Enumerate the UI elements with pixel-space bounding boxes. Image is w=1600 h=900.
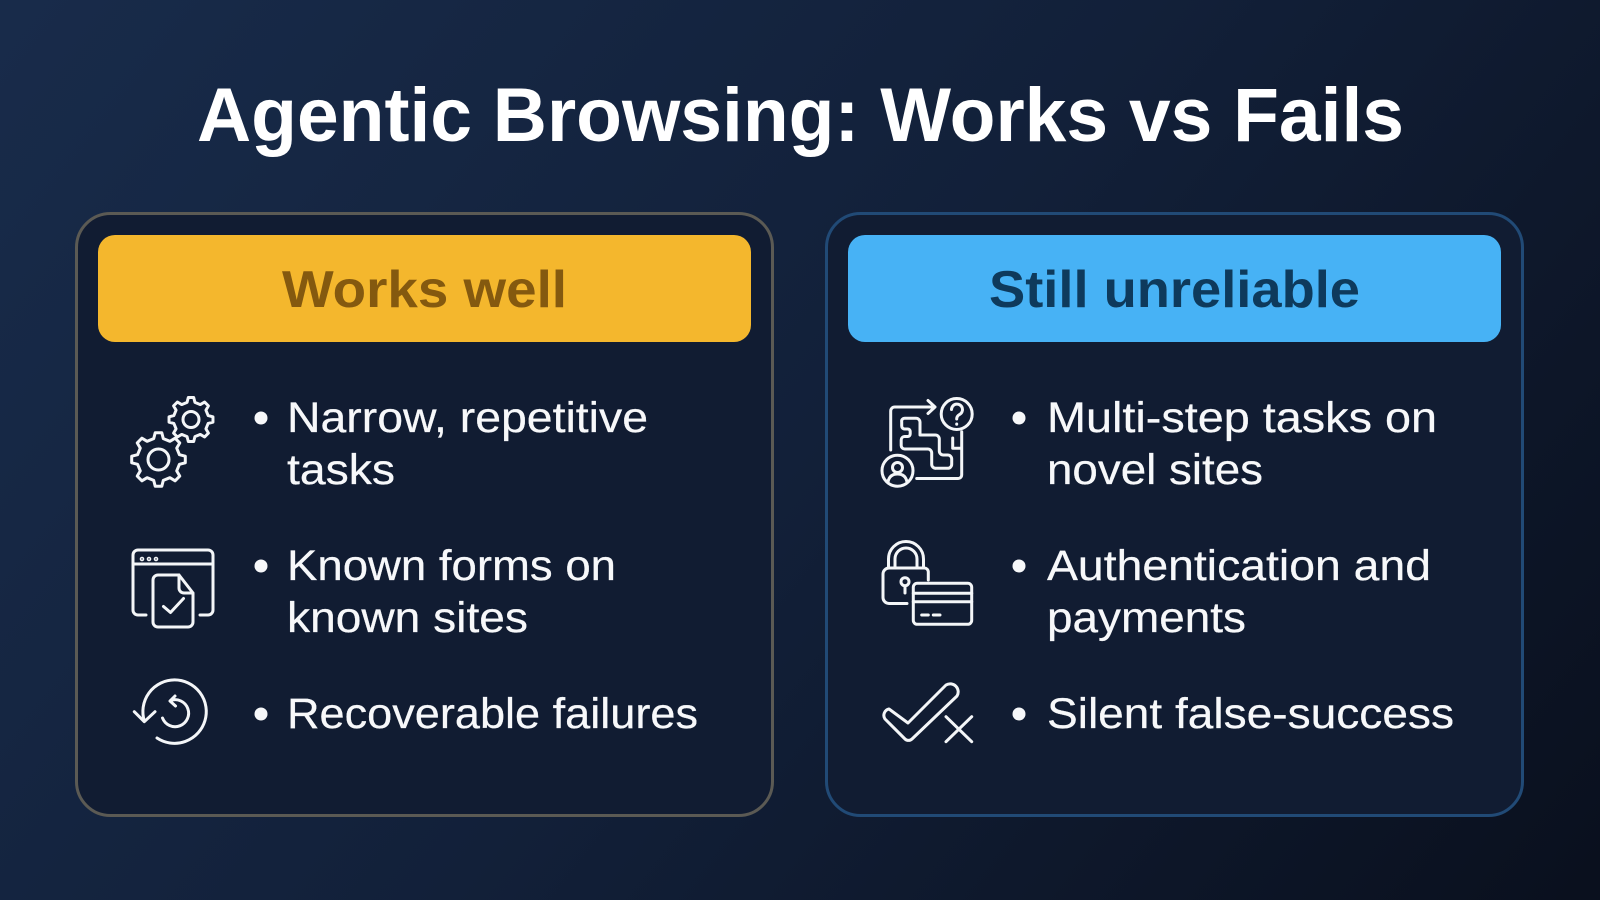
icon: recovery arrow	[134, 680, 206, 743]
bullet list: still unreliable: Authentication and	[1047, 542, 1431, 590]
header: still unreliable: Still unreliable	[989, 261, 1360, 319]
icon: maze	[882, 398, 972, 486]
panel: works well	[76, 214, 772, 816]
bullet list: still unreliable: Multi-step tasks on	[1047, 394, 1437, 442]
bullet list: works well: Recoverable failures	[287, 690, 698, 738]
icon: gears	[132, 398, 213, 486]
bullet list: works well	[254, 394, 698, 738]
bullet list: still unreliable: payments	[1047, 594, 1246, 642]
bullet list: works well: Known forms on	[287, 542, 616, 590]
header: works well	[98, 235, 751, 342]
header: works well: Works well	[282, 261, 567, 319]
bullet list: works well: Narrow, repetitive	[287, 394, 648, 442]
bullet list: works well: tasks	[287, 446, 395, 494]
icon: lock and card	[883, 542, 972, 624]
title: Agentic Browsing: Works vs Fails	[197, 73, 1404, 158]
bullet list: works well: known sites	[287, 594, 528, 642]
bullet list: still unreliable	[1012, 394, 1454, 738]
icon: silent false success	[884, 684, 972, 742]
panel: still unreliable	[826, 214, 1522, 816]
header: still unreliable	[848, 235, 1501, 342]
bullet list: still unreliable: novel sites	[1047, 446, 1263, 494]
icon: browser form	[133, 550, 213, 627]
bullet list: still unreliable: Silent false-success	[1047, 690, 1454, 738]
